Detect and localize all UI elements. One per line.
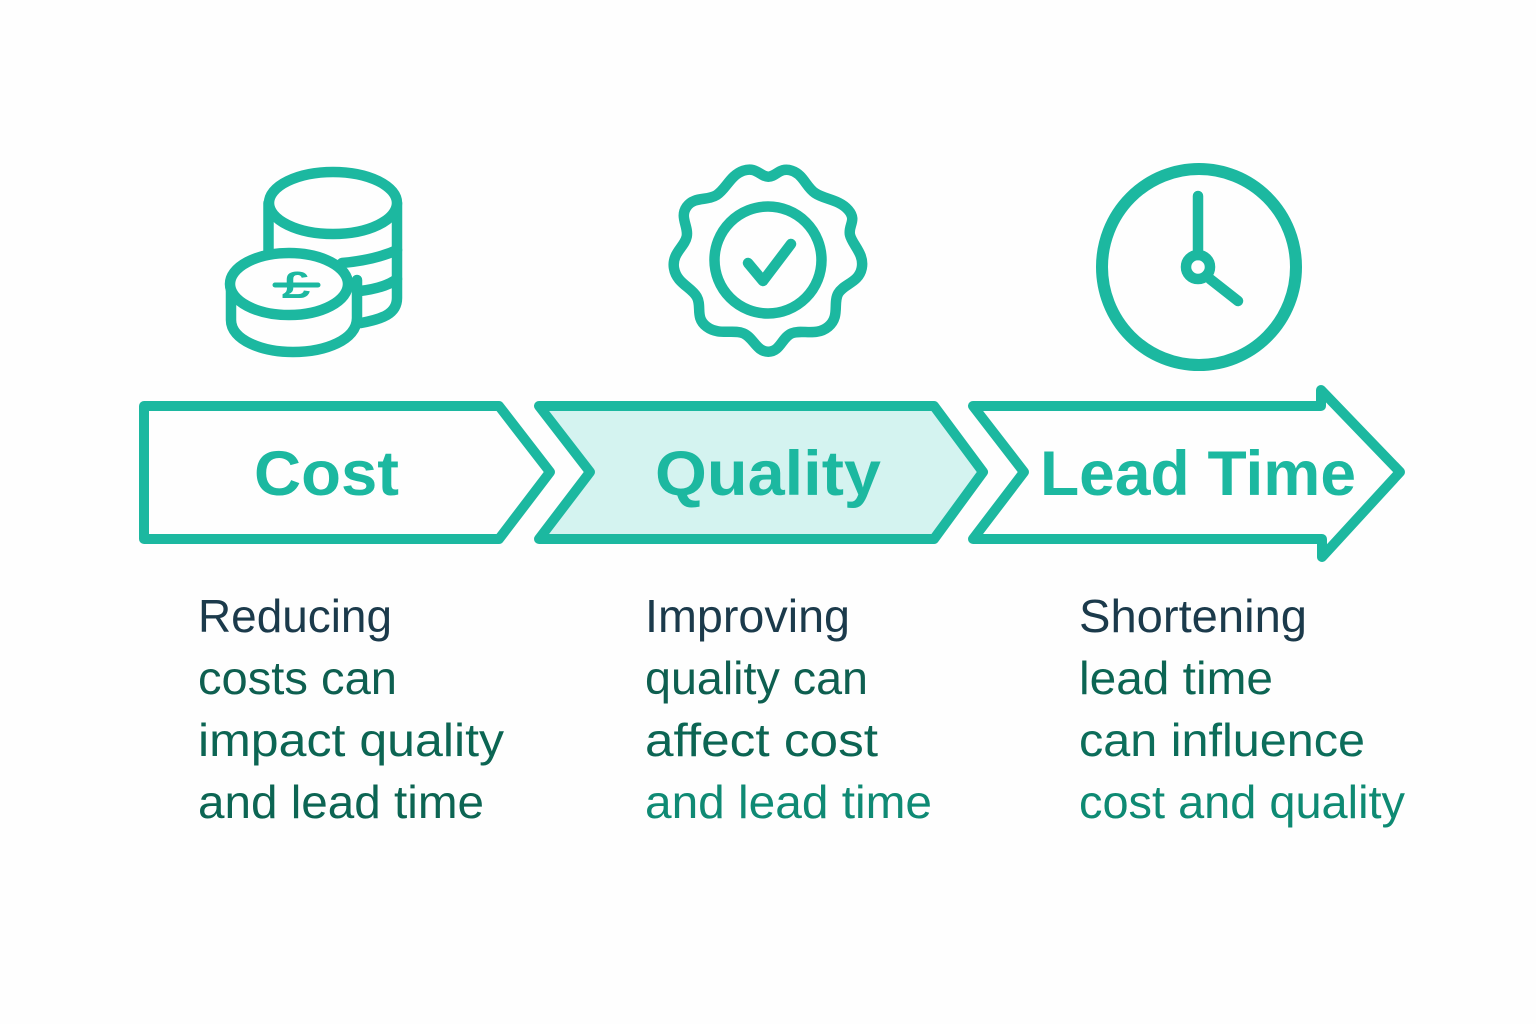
icon: stack of pound coins: £ bbox=[282, 263, 310, 306]
arrow: quality bbox=[539, 406, 983, 539]
icon: quality badge with check mark bbox=[674, 170, 862, 352]
text block: lead time bbox=[1079, 590, 1405, 828]
text block: lead time: can influence bbox=[1079, 714, 1365, 766]
text block: quality: affect cost bbox=[645, 714, 878, 766]
text block: cost: costs can bbox=[198, 652, 397, 704]
text block: quality: Improving bbox=[645, 590, 850, 642]
icon: clock bbox=[1102, 169, 1296, 365]
text block: quality bbox=[645, 590, 932, 828]
text block: lead time: cost and quality bbox=[1079, 776, 1405, 828]
text block: cost: and lead time bbox=[198, 776, 484, 828]
text block: cost: Reducing bbox=[198, 590, 392, 642]
panel: lead time bbox=[973, 169, 1405, 828]
arrow: cost bbox=[144, 406, 550, 539]
panel: quality bbox=[539, 170, 983, 828]
text block: quality: quality can bbox=[645, 652, 868, 704]
text block: cost: impact quality bbox=[198, 714, 504, 766]
text block: lead time: lead time bbox=[1079, 652, 1273, 704]
text block: cost bbox=[198, 590, 504, 828]
panel: cost bbox=[144, 172, 550, 828]
heading: lead time: Lead Time bbox=[1040, 439, 1356, 509]
heading: cost: Cost bbox=[254, 439, 399, 509]
text block: quality: and lead time bbox=[645, 776, 932, 828]
arrow: lead time bbox=[973, 390, 1400, 557]
text block: lead time: Shortening bbox=[1079, 590, 1307, 642]
heading: quality: Quality bbox=[655, 439, 881, 509]
icon: stack of pound coins bbox=[230, 172, 397, 352]
